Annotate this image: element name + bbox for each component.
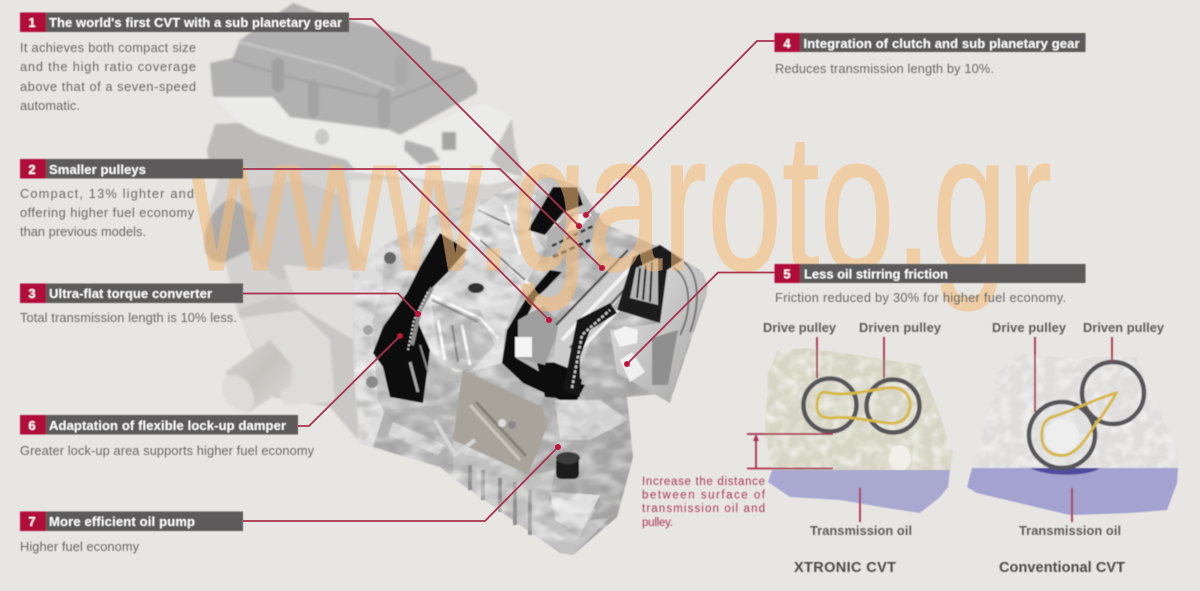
labels: Driven pulley xyxy=(859,320,942,335)
bar 1 xyxy=(20,12,349,32)
labels xyxy=(763,320,942,538)
bar 1: 1 xyxy=(28,15,36,30)
bracket highlights xyxy=(613,326,678,385)
leader 2 xyxy=(243,169,605,323)
text 2 xyxy=(20,186,195,239)
pointer lines xyxy=(817,337,884,522)
labels: Transmission oil xyxy=(810,523,912,538)
casing texture xyxy=(765,348,953,470)
sub planetary gear xyxy=(547,213,600,267)
starter motor xyxy=(240,310,335,405)
flange bolts xyxy=(363,252,396,388)
heading: Conventional CVT xyxy=(999,560,1125,576)
red note: transmission oil and xyxy=(642,503,765,515)
labels: Driven pulley xyxy=(1083,320,1165,335)
pulley face xyxy=(518,302,560,365)
casing texture xyxy=(972,353,1178,468)
text 2: than previous models. xyxy=(20,224,146,239)
lower pulley ring xyxy=(1029,402,1095,468)
oil area xyxy=(768,470,950,513)
chain xyxy=(563,303,617,397)
leader 4 xyxy=(583,41,775,218)
casing hole xyxy=(889,445,911,471)
text 1: It achieves both compact size xyxy=(20,40,196,55)
leader 1 xyxy=(349,19,582,229)
pointer lines xyxy=(1035,337,1112,522)
distance marker xyxy=(747,434,833,468)
black crescent xyxy=(502,270,585,400)
section 3 xyxy=(20,284,243,325)
text 1: automatic. xyxy=(20,98,80,113)
bar 6 xyxy=(20,415,298,434)
section 7 xyxy=(20,512,243,554)
drive pulley ring xyxy=(804,378,856,432)
text 4: Reduces transmission length by 10%. xyxy=(775,61,994,76)
red note xyxy=(642,476,766,529)
section 1 xyxy=(20,12,349,113)
bar 2 xyxy=(20,159,243,178)
bar 6: Adaptation of flexible lock-up damper xyxy=(49,418,286,433)
housing texture xyxy=(353,173,707,555)
red note: pulley. xyxy=(642,517,673,529)
engine grey side block xyxy=(207,123,355,170)
text 2: Compact, 13% lighter and xyxy=(20,186,194,201)
bar 2: 2 xyxy=(28,162,36,177)
belt stripes xyxy=(553,250,655,372)
bar 5 xyxy=(774,264,1086,283)
text 5: Friction reduced by 30% for higher fuel economy. xyxy=(775,290,1066,305)
bar 5: Less oil stirring friction xyxy=(804,266,948,282)
light left flange xyxy=(353,245,392,447)
text 1: above that of a seven-speed xyxy=(20,79,196,94)
engine lower body xyxy=(205,165,523,447)
centre hub xyxy=(1045,419,1079,453)
oil area xyxy=(967,468,1178,515)
bar 7: More efficient oil pump xyxy=(49,514,195,529)
bar 1: The world's first CVT with a sub planetary gear xyxy=(49,15,342,30)
oil filter plate xyxy=(453,370,547,472)
ghosted engine xyxy=(204,3,523,447)
section 5 xyxy=(774,264,1086,305)
labels: Drive pulley xyxy=(763,320,837,335)
leader lines xyxy=(243,19,775,521)
text 7: Higher fuel economy xyxy=(20,539,140,554)
dark contact xyxy=(1030,468,1100,475)
section 6 xyxy=(20,415,315,458)
upper pulley ring xyxy=(1082,362,1144,424)
roller bearing xyxy=(617,245,683,323)
heading: XTRONIC CVT xyxy=(794,560,896,576)
transmission housing xyxy=(353,173,707,555)
engine middle band xyxy=(213,97,523,185)
labels xyxy=(992,320,1165,538)
diagram: XTRONIC CVT xyxy=(642,320,953,576)
labels: Transmission oil xyxy=(1019,523,1121,538)
pulley highlight xyxy=(515,337,532,357)
bar 3: 3 xyxy=(28,286,36,301)
bar 2: Smaller pulleys xyxy=(49,162,146,177)
text 3: Total transmission length is 10% less. xyxy=(20,310,237,325)
bar 7: 7 xyxy=(28,514,36,529)
valve port xyxy=(468,283,484,293)
black upper window xyxy=(528,187,583,235)
cap rings xyxy=(674,262,697,335)
labels: Drive pulley xyxy=(992,320,1067,335)
driven pulley ring xyxy=(866,380,920,432)
engine sump xyxy=(283,265,355,384)
text 1 xyxy=(20,40,196,113)
casing xyxy=(972,353,1178,468)
engine valve cover xyxy=(210,3,477,135)
belt xyxy=(817,388,910,423)
engine details xyxy=(315,129,329,145)
lower case xyxy=(373,405,465,470)
centre valve body xyxy=(417,173,545,372)
leader 7 xyxy=(243,444,561,521)
bar 4: Integration of clutch and sub planetary gear xyxy=(804,36,1080,51)
oil tube xyxy=(435,420,475,455)
bar 4: 4 xyxy=(783,36,791,51)
bar 7 xyxy=(20,512,243,531)
red note: between surface of xyxy=(642,490,766,502)
black converter window xyxy=(373,233,467,403)
red note: Increase the distance xyxy=(642,476,765,488)
black oil cap xyxy=(556,452,580,479)
bar 5: 5 xyxy=(783,266,791,282)
section 4 xyxy=(774,33,1086,76)
engine pipe xyxy=(204,198,256,262)
bar 6: 6 xyxy=(28,418,36,433)
text 6: Greater lock-up area supports higher fuel economy xyxy=(20,443,315,458)
end cap xyxy=(610,260,708,403)
valve body ridges xyxy=(430,205,530,365)
oil pan xyxy=(453,440,617,555)
converter coil xyxy=(408,288,432,392)
leader 5 xyxy=(624,272,775,367)
bar 3: Ultra-flat torque converter xyxy=(49,286,212,301)
valve body shadows xyxy=(432,210,525,362)
diagram: Conventional CVT xyxy=(967,320,1178,576)
section 2 xyxy=(20,159,243,239)
leader 6 xyxy=(298,333,403,426)
casing xyxy=(765,348,953,470)
belt xyxy=(1042,393,1116,455)
text 1: and the high ratio coverage xyxy=(20,59,196,74)
bar 3 xyxy=(20,284,243,303)
transmission xyxy=(353,173,708,555)
text 2: offering higher fuel economy xyxy=(20,205,195,220)
leader 3 xyxy=(243,294,421,317)
